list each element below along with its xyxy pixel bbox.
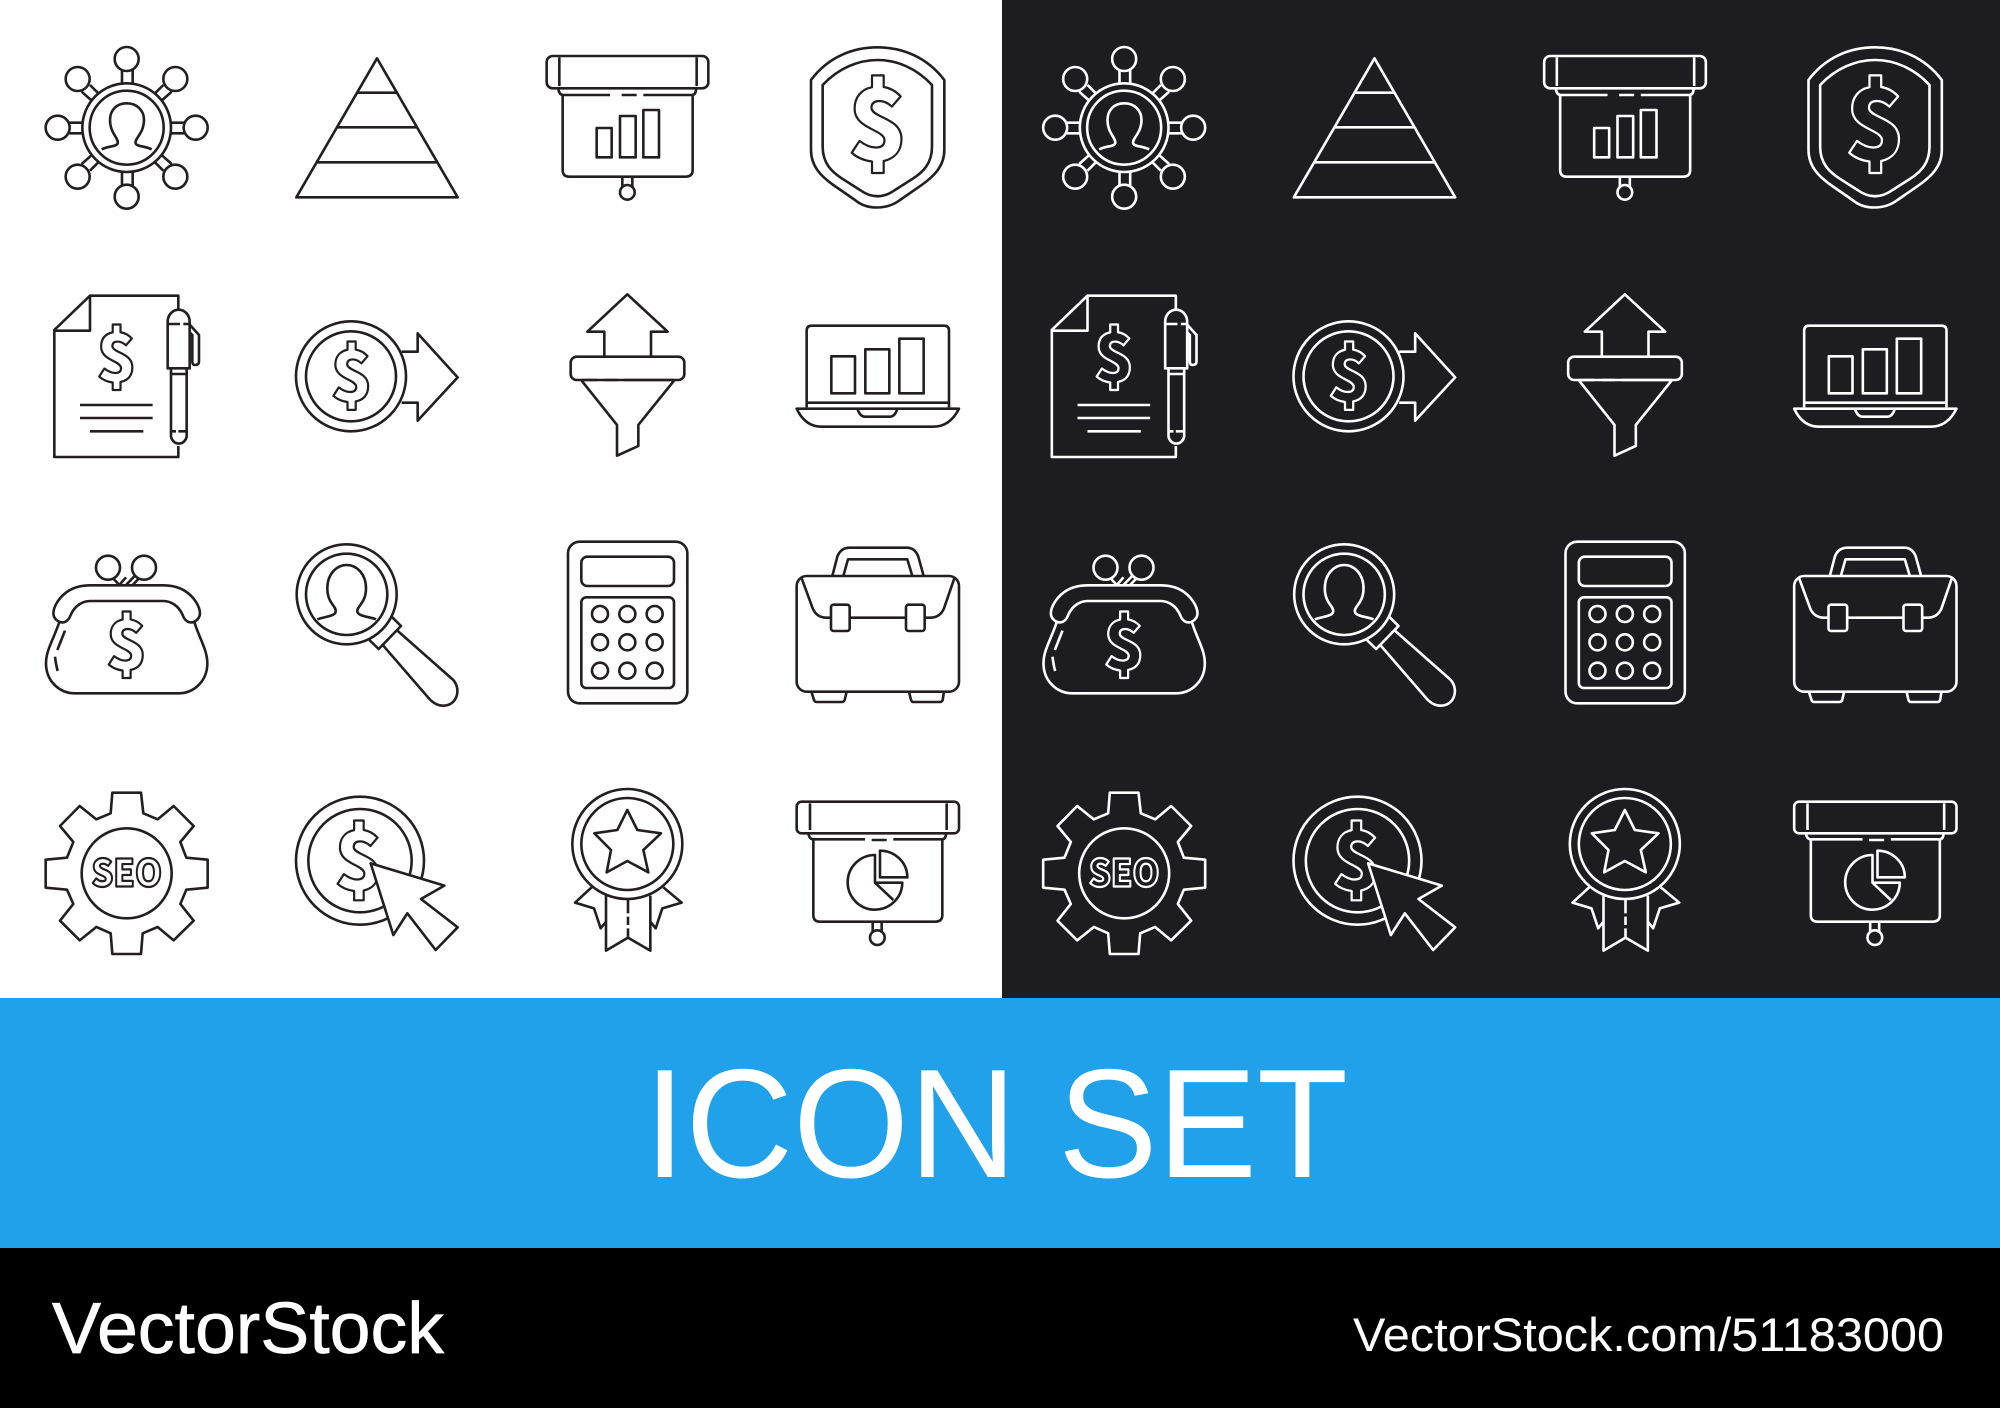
icon: dollar shield [1808, 44, 1942, 207]
icon: magnifier with person [1294, 544, 1455, 706]
image url: VectorStock.com/51183000 [1353, 1308, 1944, 1361]
icon: funnel with up arrow [1568, 294, 1682, 456]
footer bar [0, 1248, 2000, 1408]
icon: dollar coin with cursor: $ [1332, 795, 1381, 914]
icon: briefcase [1794, 548, 1956, 702]
icon: magnifier with person [297, 544, 457, 706]
icon: calculator [568, 542, 687, 703]
icon: briefcase [797, 548, 959, 702]
icon: calculator [1565, 542, 1685, 703]
icon: SEO gear [46, 793, 208, 954]
icon: dollar coin with cursor: $ [334, 795, 384, 914]
brand: VectorStock: VectorStock [52, 1289, 445, 1369]
panel: light icon grid [0, 0, 1002, 998]
title: ICON SET: ICON SET [644, 1037, 1348, 1210]
title banner [0, 998, 2000, 1248]
icon: coin with arrow: $ [330, 321, 373, 422]
panel: dark icon grid [1002, 0, 2000, 998]
icon: coin with arrow: $ [1328, 321, 1370, 422]
icon: coin with arrow [1293, 321, 1455, 431]
icon: presentation board with bar chart [1544, 56, 1706, 200]
icon: coin purse: $ [1103, 591, 1145, 690]
icon: presentation board with pie chart [1794, 802, 1956, 945]
icon: SEO gear: SEO [1089, 844, 1159, 898]
icon: coin purse: $ [106, 591, 147, 690]
icon: laptop with bar chart [1794, 326, 1956, 427]
icon: award medal with star [1570, 789, 1680, 951]
icon: funnel with up arrow [571, 294, 684, 456]
icon: pyramid [1294, 58, 1455, 197]
icon: dollar coin with cursor [1293, 795, 1455, 950]
icon: document with pen [54, 296, 199, 457]
icon: dollar coin with cursor [296, 795, 458, 950]
icon: coin purse [46, 556, 207, 693]
icon: SEO gear [1043, 793, 1205, 954]
icon: laptop with bar chart [797, 326, 959, 427]
icon: document with pen: $ [96, 306, 137, 402]
icon: SEO gear: SEO [91, 844, 162, 898]
icon: presentation board with pie chart [797, 802, 959, 945]
icon: document with pen [1052, 296, 1196, 457]
icon: dollar shield: $ [1845, 44, 1906, 189]
icon: person network [46, 47, 208, 209]
icon: dollar shield [811, 44, 944, 207]
icon: presentation board with bar chart [547, 56, 708, 200]
icon: coin with arrow [296, 321, 458, 431]
icon: person network [1043, 47, 1205, 209]
icon: coin purse [1043, 556, 1205, 693]
icon: award medal with star [572, 789, 682, 951]
icon: document with pen: $ [1094, 306, 1134, 402]
icon: dollar shield: $ [848, 44, 908, 189]
icon: pyramid [296, 58, 458, 197]
